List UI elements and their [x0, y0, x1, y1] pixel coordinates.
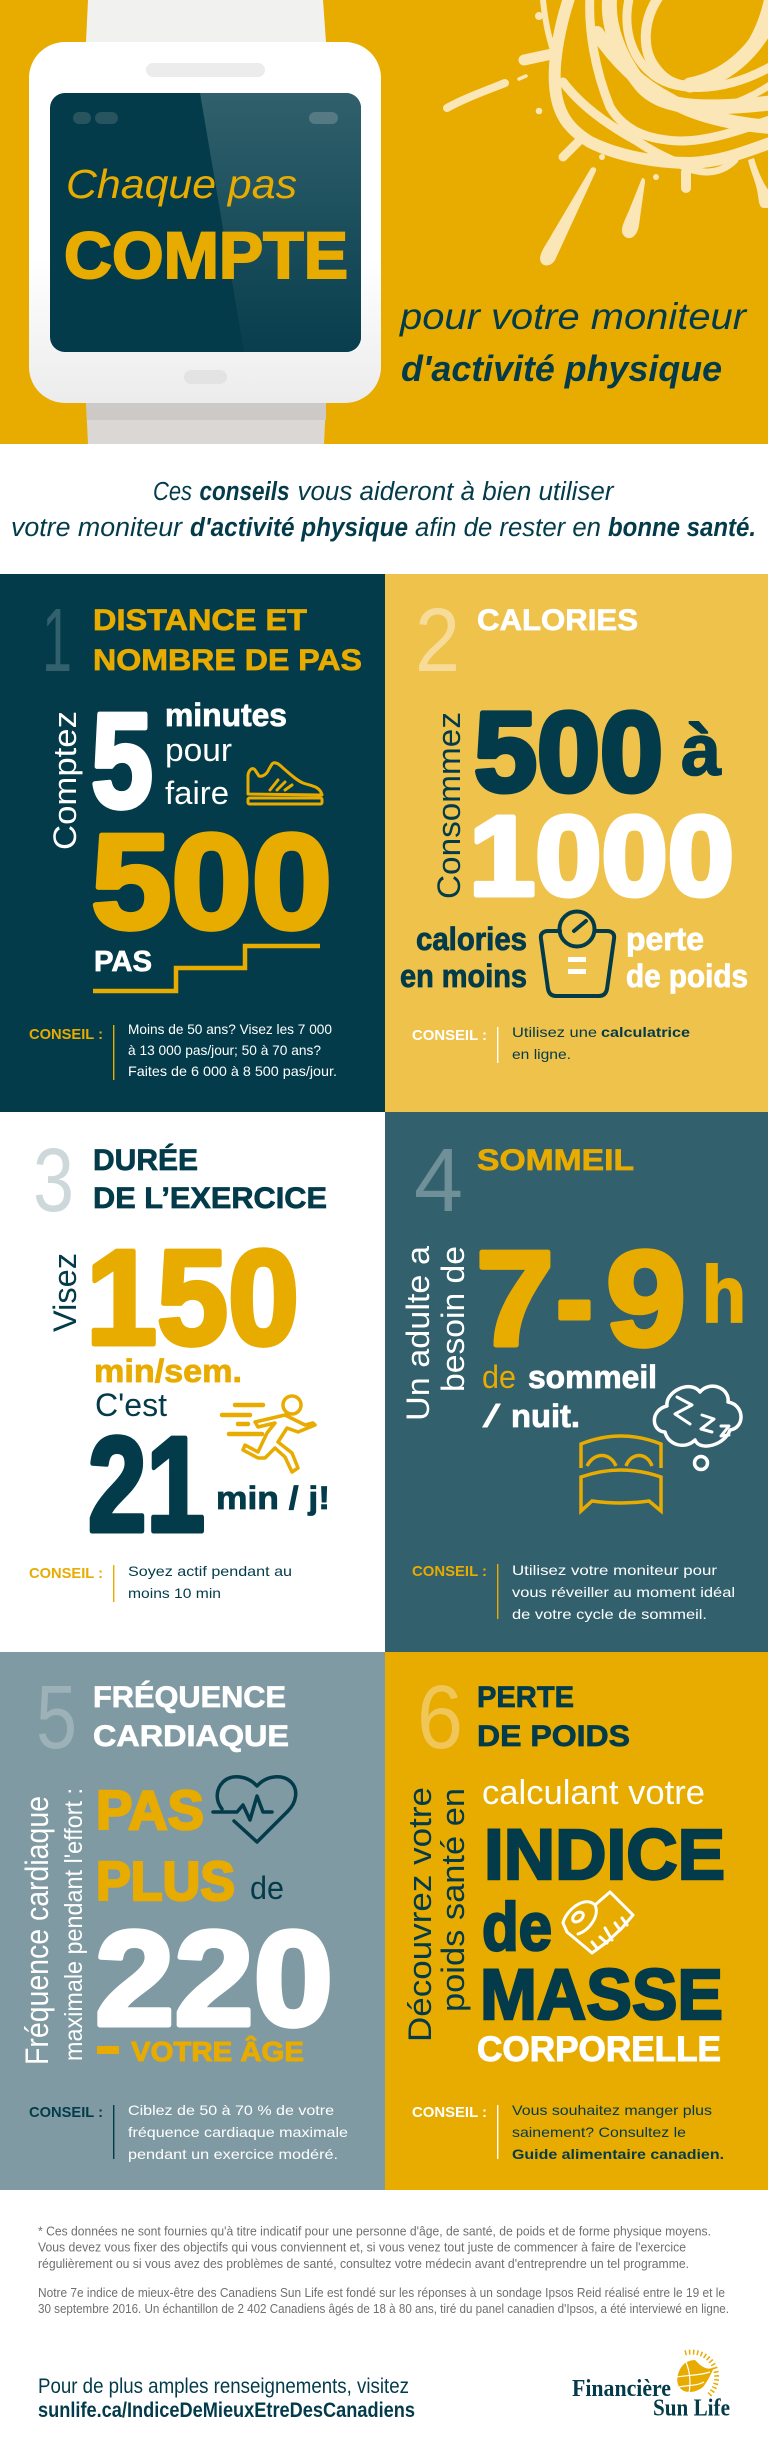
icon: running shoe — [248, 763, 322, 804]
heading: NOMBRE DE PAS — [93, 644, 362, 677]
h: h — [702, 1250, 746, 1339]
big 7-9: 9 — [606, 1223, 686, 1374]
heading: CALORIES — [477, 604, 638, 637]
min / j!: min / j! — [216, 1480, 330, 1516]
de sommeil / nuit. — [482, 1359, 657, 1434]
icon: stairs — [93, 946, 320, 991]
heading: DE L’EXERCICE — [93, 1182, 327, 1215]
C'est: C'est — [95, 1387, 167, 1423]
de sommeil / nuit.: nuit. — [511, 1398, 580, 1434]
conseil: vous réveiller au moment idéal — [512, 1584, 735, 1600]
conseil: Ciblez de 50 à 70 % de votre — [128, 2102, 334, 2118]
icon: home button — [184, 370, 227, 384]
vertical text: poids santé en — [435, 1788, 471, 2012]
big 7-9 — [476, 1223, 686, 1374]
conseil: Utilisez votre moniteur pour — [512, 1562, 717, 1578]
vertical text: maximale pendant l'effort : — [60, 1788, 88, 2061]
conseil — [412, 2102, 724, 2162]
PLUS de: PLUS — [96, 1850, 235, 1912]
call to action — [38, 2375, 415, 2422]
icon: measuring tape — [563, 1892, 633, 1953]
big 7-9: 7 — [476, 1223, 554, 1374]
conseil: Soyez actif pendant au — [128, 1563, 292, 1579]
conseil: moins 10 min — [128, 1585, 221, 1601]
conseil: CONSEIL : — [29, 1565, 103, 1582]
big 500: 500 — [91, 806, 332, 957]
perte de poids: perte — [626, 921, 704, 957]
big 500: 500 — [474, 689, 663, 815]
big 220: 220 — [95, 1903, 333, 2054]
heading — [477, 1681, 630, 1753]
heading: DISTANCE ET — [93, 604, 307, 637]
call to action: Pour de plus amples renseignements, visitez — [38, 2375, 409, 2398]
conseil: à 13 000 pas/jour; 50 à 70 ans? — [128, 1042, 321, 1058]
footnote text: * Ces données ne sont fournies qu'à titre indicatif pour une personne d'âge, de santé, de poids et de forme physique moyens. — [38, 2224, 711, 2238]
title: Chaque pas: Chaque pas — [66, 161, 297, 207]
icon: bathroom scale — [541, 912, 614, 996]
panel: 4 sommeil — [385, 1112, 768, 1652]
conseil: CONSEIL : — [412, 1027, 487, 1044]
logo: Financière Sun Life: Sun Life — [653, 2396, 730, 2422]
perte de poids: de poids — [626, 958, 748, 994]
heading: CARDIAQUE — [93, 1720, 289, 1753]
watch screen — [50, 93, 361, 352]
icon: heart pulse — [213, 1777, 296, 1842]
title: COMPTE: COMPTE — [64, 218, 348, 292]
big 7-9: - — [556, 1223, 593, 1374]
conseil: Faites de 6 000 à 8 500 pas/jour. — [128, 1063, 337, 1079]
conseil: CONSEIL : — [29, 2104, 103, 2121]
conseil — [412, 1024, 690, 1063]
big 5: 5 — [91, 685, 153, 836]
vertical text Comptez: Comptez — [47, 711, 83, 850]
PAS: PAS — [96, 1779, 204, 1841]
PAS label: PAS — [94, 946, 152, 978]
number 6: 6 — [417, 1668, 463, 1768]
conseil: sainement? Consultez le — [512, 2124, 686, 2140]
conseil: Utilisez une — [512, 1024, 597, 1040]
conseil: fréquence cardiaque maximale — [128, 2124, 348, 2140]
big 1000: 1000 — [469, 793, 734, 919]
heading: DE POIDS — [477, 1720, 630, 1753]
big 21: 21 — [88, 1409, 205, 1560]
icon: watch strap top — [86, 0, 326, 42]
calories en moins — [400, 921, 527, 994]
conseil — [29, 1563, 292, 1602]
de sommeil / nuit.: / — [482, 1398, 501, 1434]
panel: 2 calories — [385, 574, 768, 1112]
icon: speaker pill — [146, 63, 265, 77]
conseil: CONSEIL : — [412, 2104, 487, 2121]
number 4: 4 — [414, 1131, 463, 1231]
footnote text: 30 septembre 2016. Un échantillon de 2 402 Canadiens âgés de 18 à 80 ans, tiré du panel canadien d'Ipsos, a été interviewé en ligne. — [38, 2302, 729, 2316]
number 3: 3 — [33, 1131, 74, 1231]
conseil: Moins de 50 ans? Visez les 7 000 — [128, 1021, 332, 1037]
conseil: Vous souhaitez manger plus — [512, 2102, 712, 2118]
number 5: 5 — [36, 1668, 77, 1768]
subtitle line 2: d'activité physique — [401, 348, 722, 389]
icon: sun rays and drops — [535, 12, 768, 266]
calculant votre: calculant votre — [482, 1774, 705, 1812]
vertical text Consommez: Consommez — [431, 712, 467, 899]
heading: SOMMEIL — [477, 1144, 634, 1177]
heading: DURÉE — [93, 1143, 198, 1177]
icon: bed — [581, 1436, 661, 1511]
minutes pour faire: pour — [165, 732, 232, 768]
intro text: afin de rester en — [415, 514, 601, 542]
heading: PERTE — [477, 1681, 574, 1714]
perte de poids — [626, 921, 748, 994]
MASSE: MASSE — [480, 1956, 723, 2035]
panel: 5 fréquence cardiaque — [0, 1652, 385, 2190]
minutes pour faire — [165, 697, 287, 811]
number 1: 1 — [42, 591, 72, 691]
heading — [93, 1680, 289, 1753]
footnote text: régulièrement ou si vous avez des problèmes de santé, consultez votre médecin avant d'entreprendre un tel programme. — [38, 2257, 689, 2271]
heading — [93, 604, 362, 677]
icon: watch body — [29, 42, 381, 403]
vertical text: Fréquence cardiaque — [19, 1796, 55, 2065]
heading: FRÉQUENCE — [93, 1680, 286, 1714]
panel: 6 perte de poids — [385, 1652, 768, 2190]
heading — [93, 1143, 327, 1215]
conseil — [412, 1562, 735, 1622]
conseil: Guide alimentaire canadien. — [512, 2146, 724, 2162]
icon: runner — [222, 1396, 315, 1472]
icon: logo sun — [677, 2352, 717, 2396]
de sommeil / nuit.: de — [482, 1359, 516, 1395]
logo: Financière Sun Life — [572, 2352, 730, 2422]
calories en moins: en moins — [400, 958, 527, 994]
vertical text — [400, 1246, 471, 1421]
vertical text: Découvrez votre — [402, 1787, 438, 2042]
vertical text: besoin de — [435, 1246, 471, 1392]
intro text: d'activité physique — [190, 514, 408, 542]
conseil: en ligne. — [512, 1046, 571, 1062]
conseil: pendant un exercice modéré. — [128, 2146, 338, 2162]
minus votre âge: VOTRE ÂGE — [131, 2036, 304, 2067]
conseil: de votre cycle de sommeil. — [512, 1606, 707, 1622]
conseil — [29, 2102, 348, 2162]
icon: sun scribble — [447, 0, 768, 188]
PLUS de: de — [250, 1870, 284, 1906]
panel: 3 durée de l'exercice — [0, 1112, 385, 1652]
de sommeil / nuit.: sommeil — [528, 1359, 657, 1395]
INDICE: INDICE — [484, 1816, 725, 1895]
number 2: 2 — [415, 591, 460, 691]
logo: Financière Sun Life: Financière — [572, 2376, 671, 2402]
call to action: sunlife.ca/IndiceDeMieuxEtreDesCanadiens — [38, 2399, 415, 2422]
minutes pour faire: minutes — [165, 697, 287, 733]
vertical text — [402, 1787, 471, 2042]
min/sem.: min/sem. — [94, 1353, 242, 1389]
intro text: bonne santé. — [608, 514, 756, 542]
footnote text: Vous devez vous fixer des objectifs qui vous conviennent et, si vous venez tout juste de commencer à faire de l'exercice — [38, 2241, 686, 2255]
intro text: votre moniteur — [11, 514, 184, 542]
à: à — [681, 711, 722, 791]
minutes pour faire: faire — [165, 775, 229, 811]
big 150: 150 — [86, 1222, 299, 1373]
de: de — [482, 1889, 552, 1965]
vertical text Visez: Visez — [47, 1253, 83, 1332]
intro text: conseils — [200, 478, 290, 506]
footnote text: Notre 7e indice de mieux-être des Canadiens Sun Life est fondé sur les réponses à un sondage Ipsos Reid réalisé entre le 19 et le — [38, 2286, 725, 2300]
vertical text: Un adulte a — [400, 1246, 436, 1421]
conseil — [29, 1021, 337, 1080]
icon: watch strap bottom — [86, 403, 326, 444]
intro text: Ces — [153, 478, 192, 506]
CORPORELLE: CORPORELLE — [477, 2030, 721, 2069]
calories en moins: calories — [416, 921, 527, 957]
icon: sleep cloud — [654, 1386, 741, 1470]
panel: header banner — [0, 0, 768, 444]
conseil: CONSEIL : — [412, 1563, 487, 1580]
vertical text — [19, 1788, 88, 2065]
panel: 1 distance et nombre de pas — [0, 574, 385, 1112]
intro text: vous aideront à bien utiliser — [298, 478, 615, 506]
footnote text — [38, 2224, 729, 2316]
intro text — [11, 478, 756, 542]
conseil: calculatrice — [601, 1024, 690, 1040]
subtitle line 1: pour votre moniteur — [399, 296, 748, 337]
conseil: CONSEIL : — [29, 1026, 103, 1043]
